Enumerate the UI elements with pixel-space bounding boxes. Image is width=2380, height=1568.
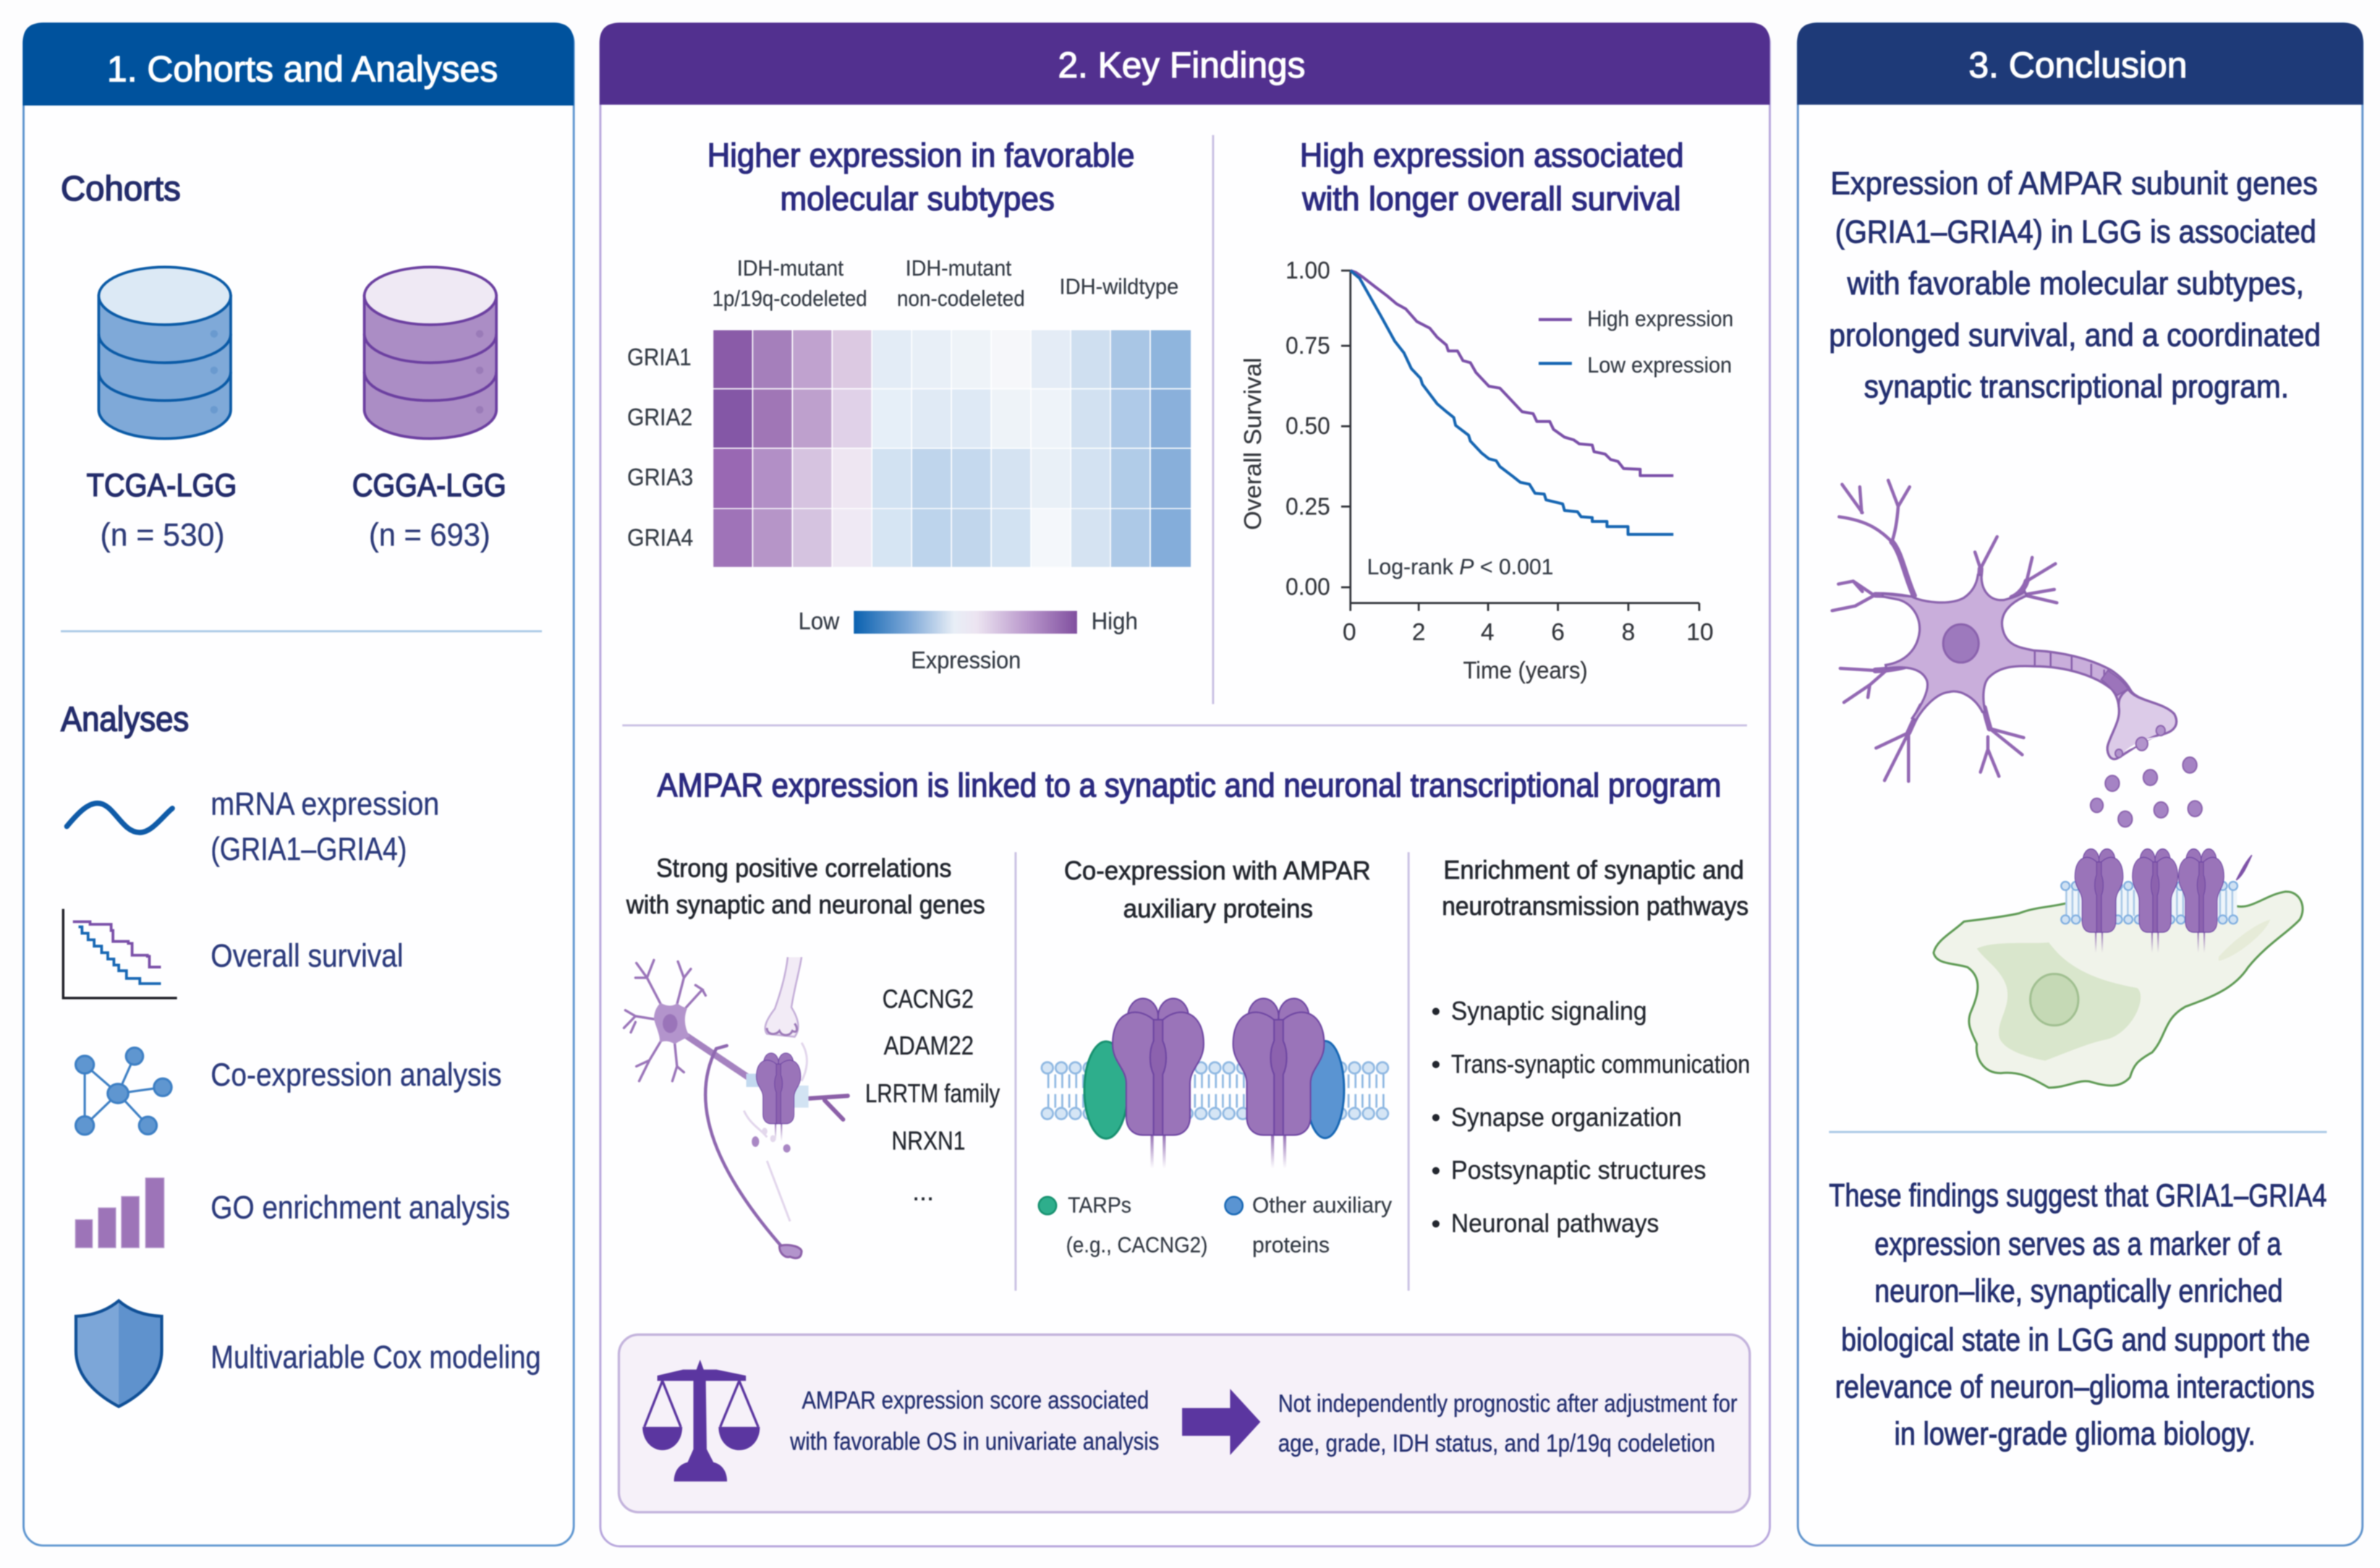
receptor left bbox=[1113, 999, 1204, 1169]
chart legend bbox=[1539, 307, 1733, 378]
heading: overall survival: with longer overall survival bbox=[1301, 180, 1681, 218]
glioma cell bbox=[1934, 892, 2303, 1088]
myelin segments bbox=[2035, 652, 2104, 683]
legend: other auxiliary proteins bbox=[1225, 1193, 1393, 1258]
heatmap column labels bbox=[713, 256, 1178, 311]
y axis tick labels: 0.00 bbox=[1285, 574, 1330, 600]
x axis tick labels: 0 bbox=[1343, 619, 1356, 646]
heading: overall survival: High expression associated bbox=[1300, 136, 1684, 174]
panel 3 header bbox=[1797, 22, 2363, 105]
legend: other auxiliary proteins: Other auxiliary bbox=[1252, 1193, 1393, 1217]
receptors bbox=[2075, 849, 2252, 953]
membrane bbox=[2065, 886, 2237, 919]
conclusion text bbox=[1829, 166, 2321, 405]
x axis tick labels: 4 bbox=[1481, 619, 1495, 646]
pathway list: Neuronal pathways bbox=[1451, 1209, 1659, 1238]
curve: low expression bbox=[1351, 270, 1673, 534]
dendrites bbox=[1832, 480, 2057, 781]
icon: co-expression network bbox=[76, 1048, 171, 1135]
lipid membrane bbox=[1047, 1068, 1386, 1114]
subheading: co-expression bbox=[1064, 856, 1371, 923]
illustration: AMPA receptors with auxiliary proteins bbox=[1047, 999, 1386, 1169]
pathway list: Postsynaptic structures bbox=[1451, 1156, 1706, 1185]
heatmap column labels: IDH-wildtype bbox=[1060, 275, 1178, 299]
pathway list: Synapse organization bbox=[1451, 1103, 1682, 1132]
chart: Kaplan-Meier survival bbox=[1240, 257, 1733, 684]
icon: balance scales bbox=[642, 1360, 760, 1481]
legend: TARPs: TARPs bbox=[1068, 1193, 1131, 1217]
legend: TARPs: (e.g., CACNG2) bbox=[1066, 1233, 1207, 1258]
synaptic bouton bbox=[2107, 689, 2177, 759]
x axis tick labels: 8 bbox=[1622, 619, 1635, 646]
text: univariate: AMPAR expression score associated bbox=[802, 1386, 1149, 1414]
subheading: correlations: Strong positive correlations bbox=[656, 853, 951, 882]
TARP ellipse bbox=[1084, 1041, 1128, 1138]
text: multivariable bbox=[1278, 1390, 1738, 1457]
panel 2 header bbox=[600, 22, 1769, 105]
label: co-expression analysis: Co-expression analysis bbox=[211, 1057, 501, 1093]
panel 1 header: 1. Cohorts and Analyses bbox=[107, 48, 498, 89]
heading: transcriptional program: AMPAR expression is linked to a synaptic and neuronal transcriptional program bbox=[658, 767, 1721, 804]
icon: shield bbox=[76, 1301, 162, 1407]
heatmap row labels: GRIA3 bbox=[627, 464, 693, 491]
y axis tick labels: 0.50 bbox=[1285, 413, 1330, 440]
panel 1 header bbox=[23, 22, 574, 106]
heatmap colour legend: Expression bbox=[911, 647, 1021, 674]
gene list: LRRTM family bbox=[865, 1079, 1000, 1108]
implications text: biological state in LGG and support the bbox=[1841, 1322, 2310, 1358]
text: univariate bbox=[789, 1386, 1159, 1456]
label: CGGA-LGG: (n = 693) bbox=[369, 517, 490, 553]
subheading: enrichment: Enrichment of synaptic and bbox=[1443, 856, 1744, 885]
pathway list bbox=[1432, 997, 1750, 1238]
subheading: enrichment: neurotransmission pathways bbox=[1442, 892, 1748, 921]
illustration: neuron, synapse and glioma cell bbox=[1832, 480, 2303, 1088]
callout: multivariable result bbox=[619, 1334, 1750, 1512]
heatmap row labels: GRIA2 bbox=[627, 404, 692, 431]
conclusion text: synaptic transcriptional program. bbox=[1864, 370, 2289, 405]
heading: analyses: Analyses bbox=[61, 699, 189, 738]
label: multivariable Cox: Multivariable Cox modeling bbox=[211, 1339, 541, 1375]
gene list: ... bbox=[912, 1177, 934, 1206]
icon: enrichment bars bbox=[75, 1178, 164, 1248]
subheading: enrichment bbox=[1442, 856, 1748, 921]
arrow bbox=[1182, 1389, 1260, 1455]
pathway list: Trans-synaptic communication bbox=[1451, 1049, 1750, 1078]
heading: favorable subtypes: Higher expression in favorable bbox=[707, 136, 1134, 174]
x axis tick labels: 2 bbox=[1412, 619, 1426, 646]
heading: cohorts: Cohorts bbox=[61, 169, 181, 208]
y axis tick labels: 0.75 bbox=[1285, 333, 1330, 359]
gene list: NRXN1 bbox=[892, 1127, 965, 1156]
subheading: correlations bbox=[626, 853, 985, 919]
label: mRNA expression bbox=[211, 786, 439, 867]
label: GO enrichment: GO enrichment analysis bbox=[211, 1190, 510, 1225]
heatmap row labels bbox=[627, 344, 693, 552]
y axis tick labels: 1.00 bbox=[1285, 257, 1330, 284]
subheading: co-expression: Co-expression with AMPAR bbox=[1064, 856, 1371, 885]
panel: conclusion bbox=[1797, 22, 2363, 1546]
conclusion text: (GRIA1–GRIA4) in LGG is associated bbox=[1835, 215, 2316, 250]
heatmap colour legend bbox=[799, 608, 1138, 674]
heatmap column labels: 1p/19q-codeleted bbox=[713, 286, 867, 311]
implications text bbox=[1829, 1178, 2327, 1452]
panel 3 header: 3. Conclusion bbox=[1968, 44, 2187, 85]
heading: favorable subtypes bbox=[707, 136, 1134, 218]
chart legend: Low expression bbox=[1587, 353, 1732, 378]
y axis title: Overall Survival bbox=[1240, 357, 1267, 530]
icon: survival curves bbox=[63, 909, 177, 998]
legend: TARPs bbox=[1039, 1193, 1207, 1258]
label: mRNA expression: (GRIA1–GRIA4) bbox=[211, 832, 407, 867]
gene list: CACNG2 bbox=[883, 985, 974, 1014]
subheading: co-expression: auxiliary proteins bbox=[1123, 894, 1313, 923]
heatmap row labels: GRIA4 bbox=[627, 525, 693, 552]
text: multivariable: age, grade, IDH status, and 1p/19q codeletion bbox=[1278, 1430, 1715, 1457]
heatmap column labels: IDH-mutant bbox=[906, 256, 1012, 281]
neuron body and axon bbox=[1883, 575, 2177, 759]
label: TCGA-LGG bbox=[87, 468, 237, 553]
icon: TCGA database cylinder bbox=[98, 267, 231, 438]
implications text: neuron–like, synaptically enriched bbox=[1874, 1274, 2283, 1309]
panel: cohorts and analyses bbox=[23, 22, 574, 1546]
x axis tick labels: 6 bbox=[1551, 619, 1565, 646]
other auxiliary ellipse bbox=[1306, 1041, 1344, 1138]
released neurotransmitter bbox=[2091, 757, 2202, 827]
subheading: correlations: with synaptic and neuronal genes bbox=[626, 890, 985, 919]
conclusion text: prolonged survival, and a coordinated bbox=[1829, 318, 2321, 353]
heatmap colour legend: Low bbox=[799, 608, 840, 635]
text: univariate: with favorable OS in univariate analysis bbox=[789, 1428, 1159, 1456]
heading: overall survival bbox=[1300, 136, 1684, 218]
y axis tick labels bbox=[1285, 257, 1330, 600]
pathway list: Synaptic signaling bbox=[1451, 997, 1647, 1026]
heatmap colour legend: High bbox=[1092, 608, 1138, 635]
conclusion text: Expression of AMPAR subunit genes bbox=[1830, 166, 2318, 202]
vesicles in bouton bbox=[2115, 725, 2165, 758]
panel: key findings bbox=[600, 22, 1769, 1546]
x axis tick labels: 10 bbox=[1686, 619, 1714, 646]
log-rank annotation: Log-rank P < 0.001 bbox=[1367, 555, 1554, 579]
implications text: in lower-grade glioma biology. bbox=[1895, 1416, 2256, 1452]
heatmap column labels: non-codeleted bbox=[897, 286, 1025, 311]
label: CGGA-LGG bbox=[352, 468, 506, 553]
chart legend: High expression bbox=[1587, 307, 1733, 331]
gene list: ADAM22 bbox=[884, 1031, 974, 1060]
heatmap row labels: GRIA1 bbox=[627, 344, 692, 371]
label: CGGA-LGG: CGGA-LGG bbox=[352, 468, 506, 503]
x axis title: Time (years) bbox=[1463, 657, 1588, 684]
curve: high expression bbox=[1351, 270, 1673, 476]
label: TCGA-LGG: TCGA-LGG bbox=[87, 468, 237, 503]
icon: CGGA database cylinder bbox=[365, 267, 496, 438]
y axis tick labels: 0.25 bbox=[1285, 493, 1330, 520]
conclusion text: with favorable molecular subtypes, bbox=[1847, 266, 2304, 302]
gene list bbox=[865, 985, 1000, 1206]
nucleus bbox=[1943, 624, 1979, 662]
illustration: neuron and synapse bbox=[624, 957, 848, 1258]
label: mRNA expression: mRNA expression bbox=[211, 786, 439, 822]
heading: favorable subtypes: molecular subtypes bbox=[781, 180, 1055, 218]
label: overall survival: Overall survival bbox=[211, 939, 404, 974]
implications text: expression serves as a marker of a bbox=[1874, 1227, 2282, 1262]
text: multivariable: Not independently prognostic after adjustment for bbox=[1278, 1390, 1738, 1418]
legend: other auxiliary proteins: proteins bbox=[1252, 1233, 1330, 1258]
heatmap column labels: IDH-mutant bbox=[737, 256, 844, 281]
x axis tick labels bbox=[1343, 619, 1714, 646]
label: TCGA-LGG: (n = 530) bbox=[101, 517, 225, 553]
heatmap bbox=[713, 331, 1191, 567]
receptor right bbox=[1233, 999, 1324, 1169]
panel 2 header: 2. Key Findings bbox=[1058, 44, 1305, 85]
icon: mRNA wave bbox=[67, 804, 172, 832]
